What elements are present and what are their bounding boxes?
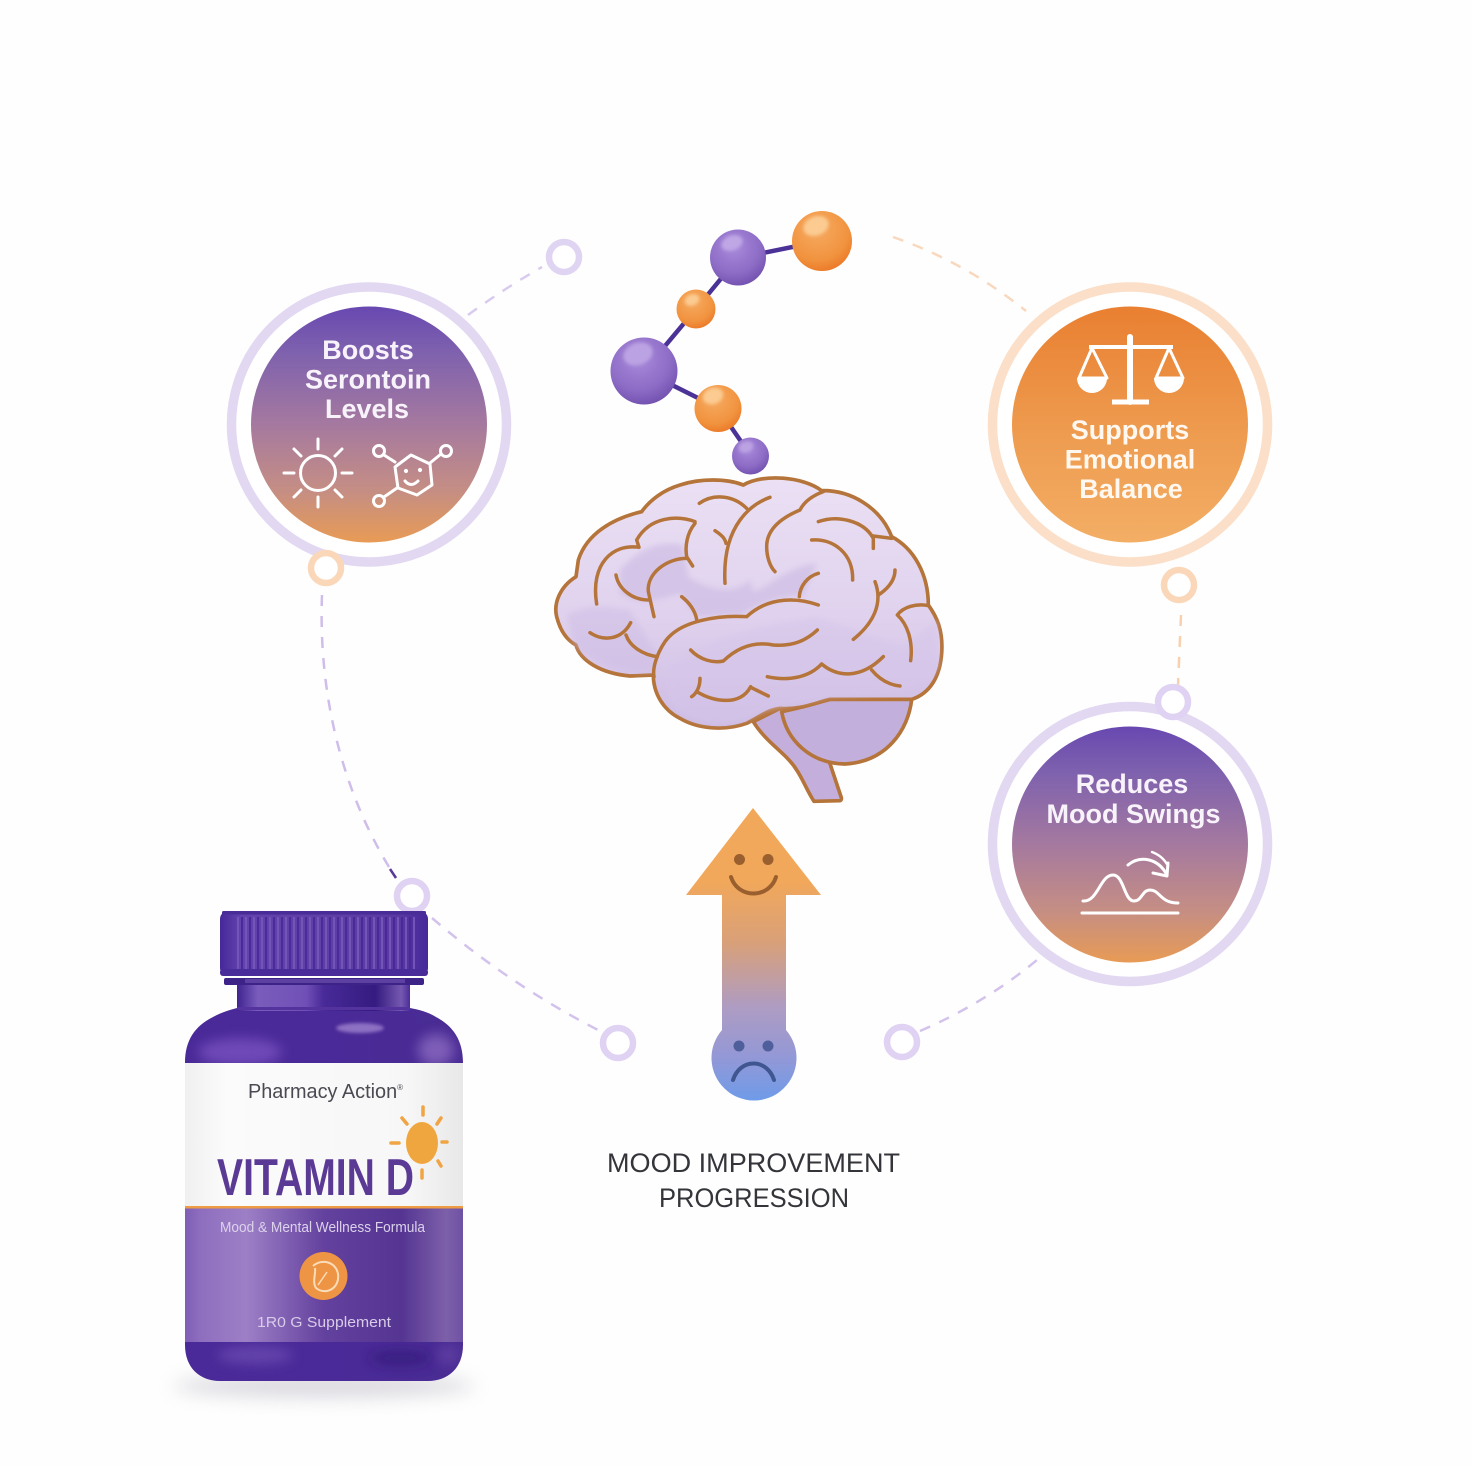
caption: mood improvement progression: PROGRESSION (659, 1183, 849, 1213)
molecule atom: purple upper (710, 230, 766, 286)
heading: mood swings: Reduces (1076, 769, 1188, 799)
icon: label sun (391, 1107, 447, 1178)
happy face (731, 854, 776, 894)
brand name: ® (397, 1083, 403, 1092)
molecule atom: large purple (610, 338, 678, 404)
node ring: right orange (1164, 570, 1194, 600)
panel: emotional balance (992, 287, 1268, 562)
dashed connector path (322, 237, 1181, 1031)
panel: boosts serotonin (232, 287, 506, 562)
molecule atom: small orange (676, 290, 716, 328)
node ring: lower left (397, 881, 427, 911)
purple label band (185, 1208, 463, 1342)
molecule atom: large orange (792, 211, 852, 271)
heading: boosts serotonin: Serontoin (305, 364, 431, 394)
tagline: Mood & Mental Wellness Formula (220, 1220, 426, 1236)
panel: mood swings (992, 706, 1268, 982)
mood arrow (686, 808, 821, 1100)
brain illustration (556, 478, 942, 801)
icon: smiling molecule (374, 446, 452, 506)
molecule chain (610, 211, 852, 474)
heading: boosts serotonin: Levels (325, 394, 409, 424)
sad face (733, 1040, 774, 1080)
heading: mood swings: Mood Swings (1047, 799, 1220, 829)
product name: VITAMIN D (217, 1149, 414, 1207)
heading: emotional balance: Emotional (1065, 444, 1195, 474)
icon: orange seal (300, 1252, 348, 1300)
heading: emotional balance: Supports (1071, 415, 1189, 445)
molecule atom: small purple (732, 438, 769, 474)
node ring: left orange (311, 553, 341, 583)
vitamin D bottle (174, 911, 474, 1398)
icon: sun (284, 439, 352, 507)
supplement note: 1R0 G Supplement (257, 1315, 391, 1331)
molecule atom: orange lower (694, 385, 742, 432)
bottle cap (220, 911, 428, 976)
icon: balance scale (1077, 337, 1184, 402)
icon: wave with arrow (1082, 852, 1178, 913)
node ring: right purple (1158, 687, 1188, 717)
node ring: bottom centre left (603, 1028, 633, 1058)
node ring: bottom centre right (887, 1027, 917, 1057)
caption: mood improvement progression (607, 1148, 900, 1213)
white label (185, 1063, 463, 1207)
caption: mood improvement progression: MOOD IMPROVEMENT (607, 1148, 900, 1178)
heading: boosts serotonin: Boosts (322, 335, 414, 365)
brand name: Pharmacy Action (248, 1081, 398, 1103)
heading: emotional balance: Balance (1079, 474, 1183, 504)
node ring: top left (549, 242, 579, 272)
